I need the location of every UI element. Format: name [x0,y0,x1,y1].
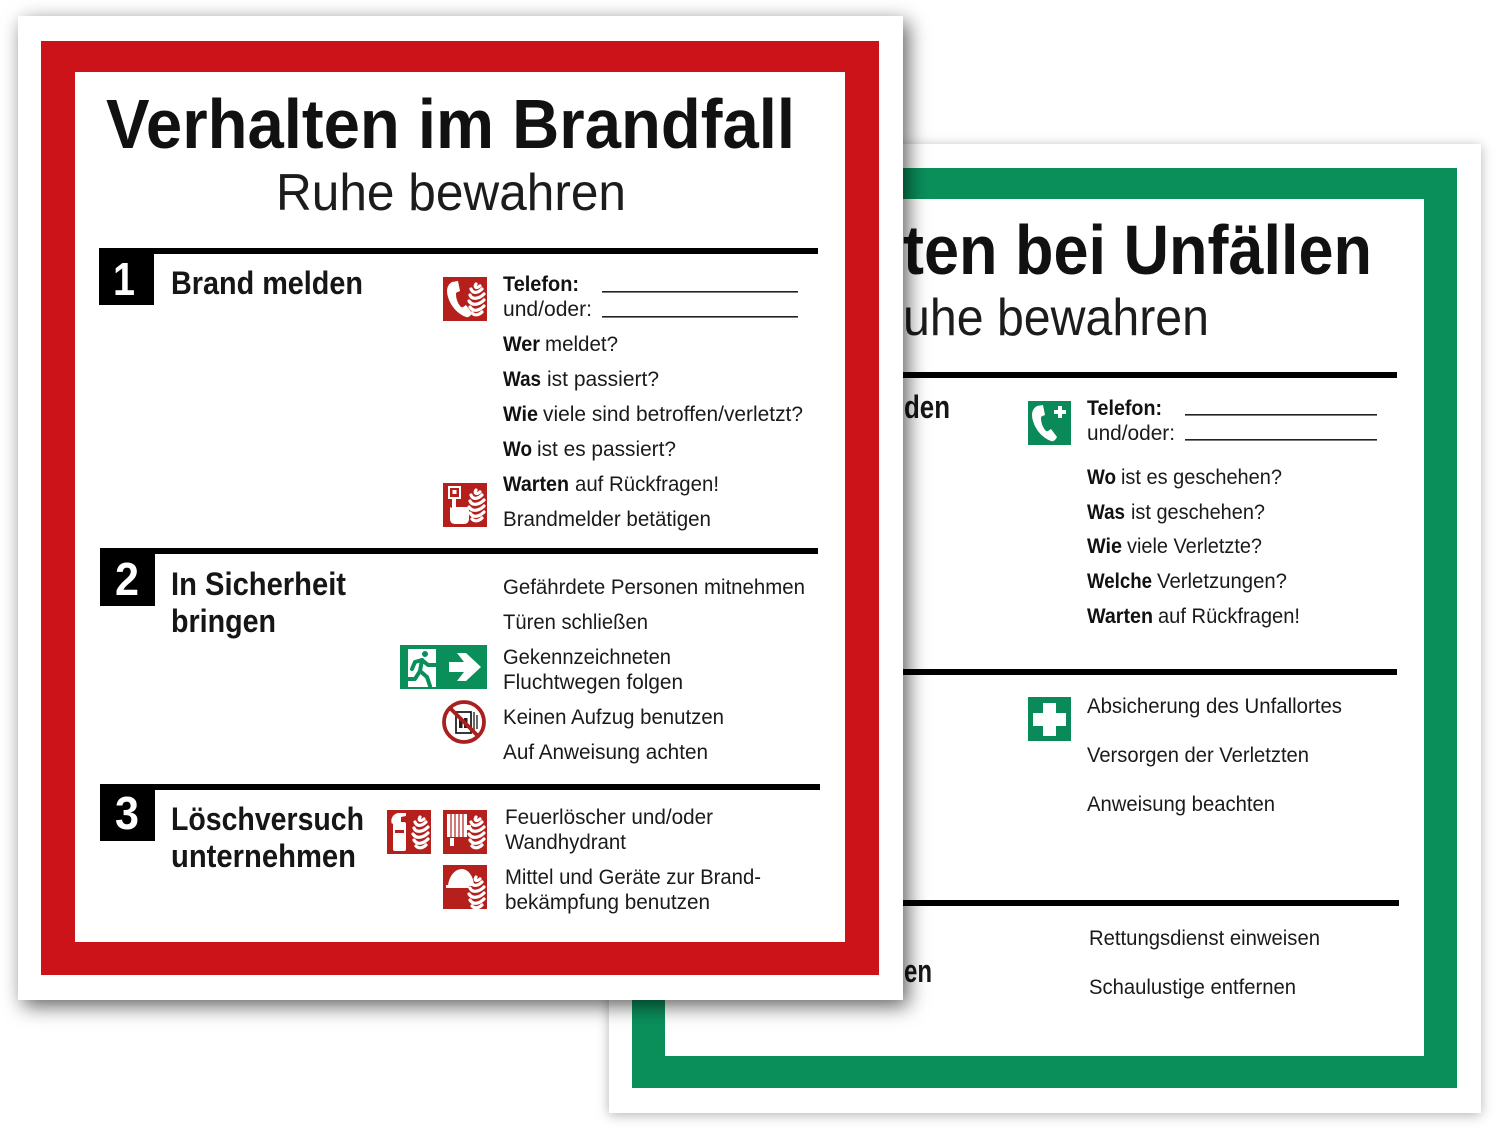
questions list: ist es geschehen? [1121,466,1282,489]
phone fields: Telefon: [503,273,579,296]
icon: fire hose [443,810,487,854]
section 2 header: bringen [171,603,276,639]
icon: emergency phone [1028,401,1071,445]
questions list: ist es passiert? [537,438,676,461]
section 2 actions: Gefährdete Personen mitnehmen [503,576,805,599]
questions list [1087,466,1300,628]
section 2 actions: Keinen Aufzug benutzen [503,706,724,729]
subtitle: green sign: uhe bewahren [903,289,1209,347]
title: green sign: ten bei Unfällen [903,211,1372,289]
questions list: auf Rückfragen! [1158,605,1300,628]
panel: fire sign (red, front) [18,16,903,1000]
questions list: meldet? [545,333,618,356]
questions list: Wer [503,333,540,356]
questions list: Brandmelder betätigen [503,508,711,531]
questions list: Verletzungen? [1157,570,1287,593]
phone fields [1087,397,1377,445]
questions list: viele sind betroffen/verletzt? [543,403,803,426]
icon: firefighting equipment [443,865,487,909]
icon: first aid cross [1028,697,1071,741]
section 3 actions: Feuerlöscher und/oder [505,806,713,829]
section 3 actions: Rettungsdienst einweisen [1089,927,1320,950]
section 2 actions [1087,695,1342,816]
phone fields: und/oder: [503,298,592,321]
section 2 actions [503,576,805,764]
section 3 actions [1089,927,1320,999]
divider section 2 [900,669,1397,675]
phone fields: Telefon: [1087,397,1162,420]
icon: fire phone [443,277,487,321]
section 3 header: unternehmen [171,838,356,874]
section 2 actions: Versorgen der Verletzten [1087,744,1309,767]
section 2 actions: Absicherung des Unfallortes [1087,695,1342,718]
section 3 header: 3 [115,787,139,839]
questions list: Was [1087,501,1125,524]
section 1 heading remnant [900,372,1397,425]
questions list: Warten [1087,605,1153,628]
questions list: ist passiert? [547,368,659,391]
questions list: Was [503,368,541,391]
section 1 heading remnant: den [904,389,950,425]
icon: emergency exit sign [400,645,487,689]
panel: first aid sign (green, behind) [609,144,1481,1113]
section 3 actions: Schaulustige entfernen [1089,976,1296,999]
section 3 actions [505,806,761,914]
section 2 header: 2 [115,553,139,605]
questions list: Wie [1087,535,1122,558]
icon: no elevator prohibition [444,702,484,742]
section 1 header: 1 [113,253,135,305]
section 2 header [100,548,818,639]
section 3 heading remnant [900,900,1399,989]
section 3 header [100,784,820,874]
questions list: Wo [1087,466,1116,489]
section 2 actions: Gekennzeichneten [503,646,671,669]
questions list [503,333,803,531]
section 3 heading remnant: en [904,953,932,989]
section 2 header: In Sicherheit [171,566,346,602]
phone fields: und/oder: [1087,422,1175,445]
phone fields [503,273,798,321]
red border [41,41,879,975]
title: Verhalten im Brandfall [106,85,795,163]
questions list: Wie [503,403,538,426]
section 1 header [99,248,818,305]
questions list: auf Rückfragen! [575,473,719,496]
questions list: ist geschehen? [1131,501,1265,524]
section 3 actions: Mittel und Geräte zur Brand- [505,866,761,889]
questions list: Wo [503,438,532,461]
section 3 actions: bekämpfung benutzen [505,891,710,914]
section 3 header: Löschversuch [171,801,364,837]
green border [632,168,1457,1088]
section 3 actions: Wandhydrant [505,831,626,854]
icon: fire extinguisher [387,810,431,854]
questions list: viele Verletzte? [1127,535,1262,558]
icon: fire alarm call point [443,483,487,527]
questions list: Warten [503,473,569,496]
subtitle: Ruhe bewahren [276,164,626,222]
section 2 actions: Anweisung beachten [1087,793,1275,816]
section 2 actions: Fluchtwegen folgen [503,671,683,694]
section 2 actions: Auf Anweisung achten [503,741,708,764]
section 1 header: Brand melden [171,265,363,301]
questions list: Welche [1087,570,1152,593]
section 2 actions: Türen schließen [503,611,648,634]
